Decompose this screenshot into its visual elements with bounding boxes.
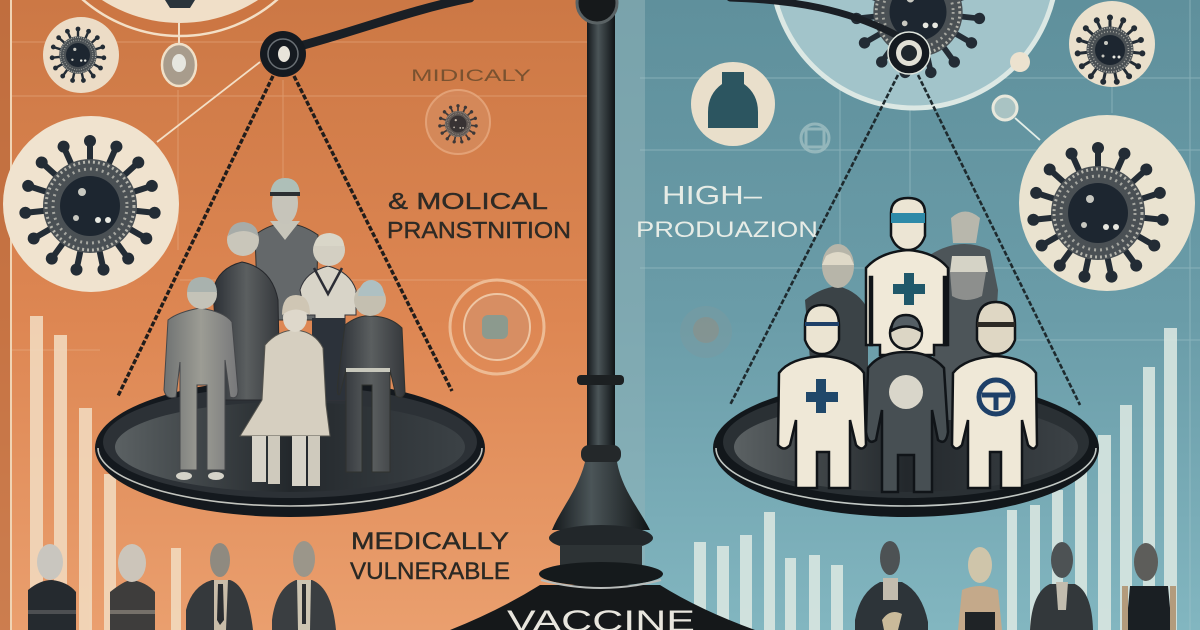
text: medical pranstnition — [387, 188, 571, 243]
person: back man — [255, 178, 318, 320]
person: centre woman — [240, 295, 330, 486]
left pan chains — [118, 76, 452, 396]
person: woman fair — [110, 544, 155, 630]
icon: virus left small — [43, 17, 119, 93]
icon: virus right large — [1019, 115, 1195, 291]
icon: lens centre left — [450, 280, 544, 374]
text: medically vulnerable: VULNERABLE — [350, 558, 510, 585]
person: front right — [337, 280, 405, 472]
right group of people — [778, 198, 1037, 492]
balance beam — [300, 0, 905, 46]
text: high production: HIGH– — [662, 180, 763, 210]
right row of bottom people — [855, 541, 1176, 630]
left group of people — [164, 178, 405, 486]
icon: small lens left — [162, 44, 196, 86]
right virus disc top — [771, 0, 1057, 108]
person: front left — [164, 277, 238, 480]
person: man suit right — [1030, 542, 1093, 630]
person: front right medic — [952, 302, 1037, 488]
icon: bottle — [691, 62, 775, 146]
right pivot — [888, 32, 930, 74]
background: teal right half — [592, 0, 1200, 630]
left panel: bar chart — [30, 316, 181, 630]
text: medically vulnerable — [350, 528, 510, 585]
person: back woman — [213, 222, 280, 400]
person: back right medic — [930, 212, 998, 420]
text: medically vulnerable: MEDICALLY — [351, 528, 509, 555]
right panel: bar chart — [694, 328, 1177, 630]
person: man suit — [186, 543, 253, 630]
person: front centre — [866, 315, 948, 492]
person: back left medic — [805, 244, 868, 420]
right pan chains — [730, 75, 1080, 405]
left scale pan — [95, 379, 485, 517]
icon: faded clinic square — [801, 124, 829, 152]
person: woman dress — [958, 547, 1002, 630]
connector lines — [157, 62, 260, 142]
person: woman arms crossed — [28, 544, 76, 630]
right scale pan — [713, 379, 1099, 517]
icon: small lens right — [993, 96, 1040, 140]
person: man clasped hands — [855, 541, 928, 630]
text: medical pranstnition: & MOLICAL — [388, 188, 548, 214]
text: medical pranstnition: PRANSTNITION — [387, 217, 571, 243]
person: front left medic — [778, 305, 866, 488]
text: medically label top: MIDICALY — [411, 66, 531, 85]
text: high production — [636, 180, 818, 242]
background: orange left half — [0, 0, 592, 630]
central pillar of the balance — [450, 0, 755, 630]
person: woman black dress — [1122, 543, 1176, 630]
person: man suit two — [272, 541, 336, 630]
left virus disc top — [32, 0, 328, 48]
icon: faded heart — [680, 306, 732, 358]
left row of bottom people — [28, 541, 336, 630]
text: high production: PRODUAZION — [636, 217, 818, 242]
person: back right — [300, 233, 356, 400]
person: back centre medic — [866, 198, 948, 355]
icon: virus left large — [3, 116, 179, 292]
icon: small virus right — [1069, 1, 1155, 87]
icon: faded virus centre left — [426, 90, 490, 154]
left pivot — [260, 31, 306, 77]
